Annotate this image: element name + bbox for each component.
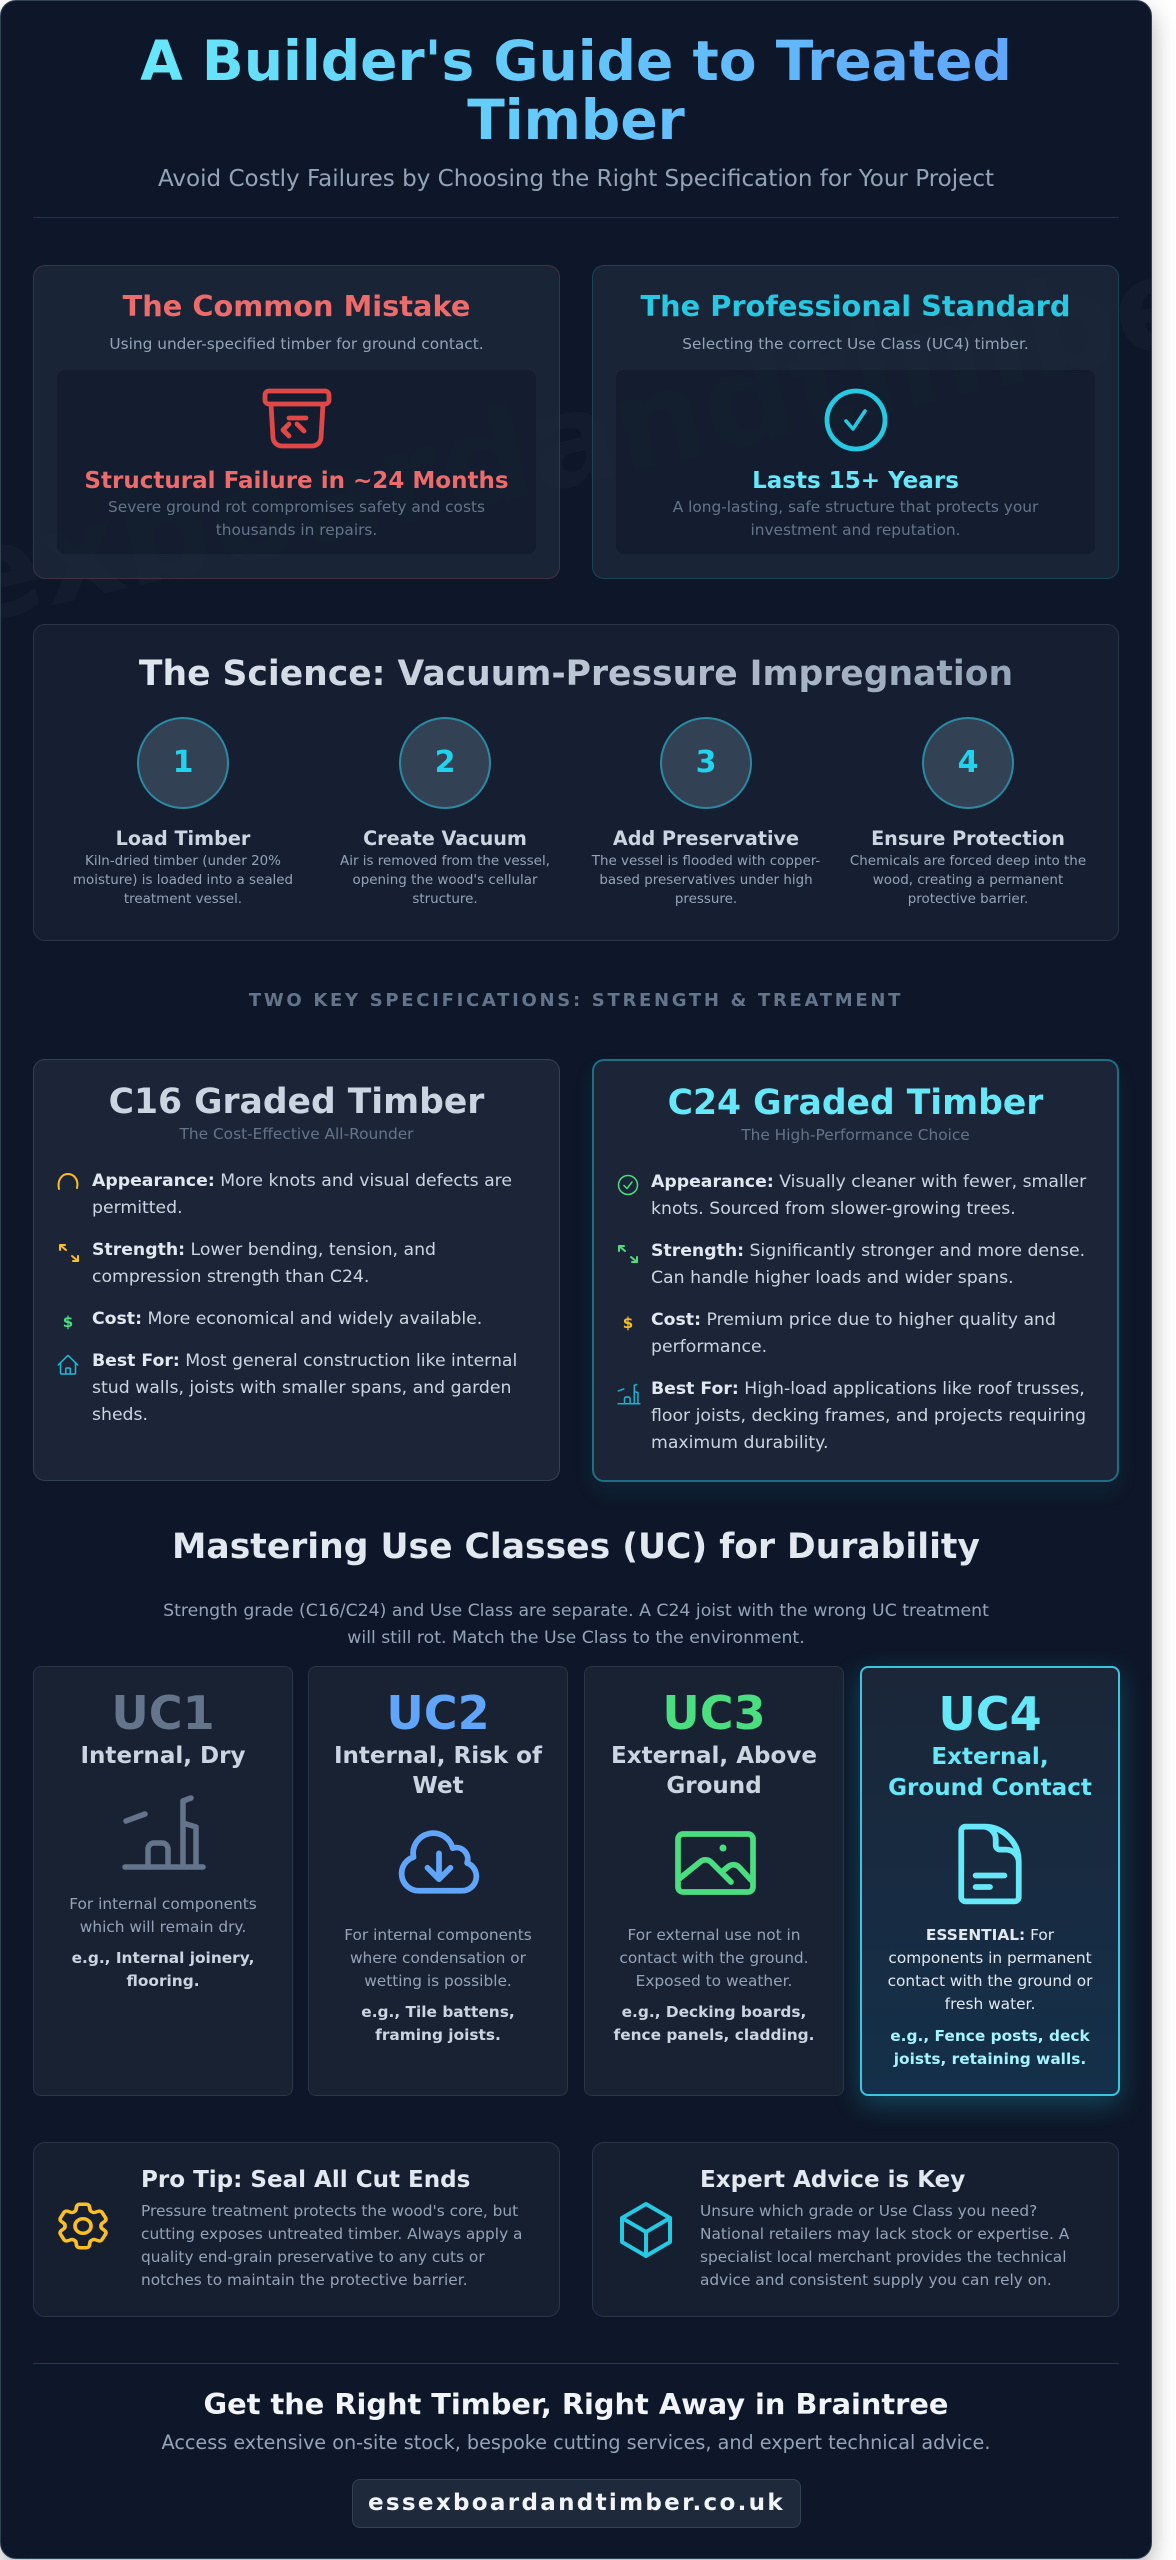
card: UC1 — [33, 1666, 293, 2096]
text: UC2 example: framing joists. — [375, 2026, 501, 2044]
text: pro tip — [141, 2200, 522, 2292]
text: use class intro: will still rot. Match the Use Class to the environment. — [347, 1628, 805, 1648]
panel: C16 — [33, 1059, 560, 1481]
item: appearance — [651, 1172, 1086, 1219]
subtitle: UC3 — [611, 1743, 817, 1799]
icon: UC1 chart — [122, 1795, 206, 1870]
item: cost: Cost: More economical and widely available. — [92, 1309, 482, 1329]
text: pro tip: cutting exposes untreated timber. Always apply a — [141, 2225, 522, 2243]
step number 3: 3 — [696, 745, 716, 780]
icon: arc — [58, 1173, 78, 1190]
text: UC4 example: e.g., Fence posts, deck — [890, 2027, 1090, 2045]
step text: Chemicals are forced deep into the — [850, 854, 1086, 869]
item: strength: Strength: Significantly stronger and more dense. — [651, 1241, 1085, 1261]
step number 3 — [660, 717, 752, 809]
label: UC2: UC2 — [386, 1686, 490, 1740]
text: UC2 description: where condensation or — [350, 1949, 526, 1967]
step title: Add Preservative — [613, 827, 799, 850]
heading: common mistake: The Common Mistake — [123, 289, 470, 323]
text: UC4 description: ESSENTIAL: For — [926, 1926, 1054, 1944]
heading: the science: The Science: Vacuum-Pressure Impregnation — [139, 654, 1013, 694]
heading: C24: C24 Graded Timber — [668, 1083, 1043, 1123]
text: UC3 example: e.g., Decking boards, — [622, 2003, 806, 2021]
panel: C24 — [592, 1059, 1119, 1482]
item: appearance: permitted. — [92, 1198, 183, 1218]
panel: professional standard — [592, 265, 1119, 579]
footer heading: Get the Right Timber, Right Away in Braintree — [204, 2387, 948, 2421]
item: strength: Strength: Lower bending, tension, and — [92, 1240, 436, 1260]
text: UC1 description: which will remain dry. — [80, 1918, 246, 1936]
item: strength: Can handle higher loads and wider spans. — [651, 1268, 1014, 1288]
step text: treatment vessel. — [124, 892, 242, 907]
step text: The vessel is flooded with copper- — [592, 854, 820, 869]
label: UC1: UC1 — [111, 1686, 215, 1740]
subtitle: UC2 — [334, 1743, 542, 1799]
step 3 — [592, 717, 820, 907]
text: UC2 description: wetting is possible. — [364, 1972, 512, 1990]
website button — [352, 2479, 801, 2528]
text: expert advice — [700, 2200, 1069, 2292]
title: A Builder's Guide to Treated — [140, 29, 1012, 93]
footer text: Access extensive on-site stock, bespoke cutting services, and expert technical advice. — [162, 2431, 990, 2454]
step number 2 — [399, 717, 491, 809]
inner result panel — [57, 370, 536, 554]
title: Timber — [467, 88, 685, 152]
text: lasting detail: A long-lasting, safe structure that protects your — [673, 498, 1038, 516]
icon: archive box — [262, 388, 332, 448]
icon: chart small — [617, 1384, 641, 1404]
subtitle: UC2: Wet — [412, 1773, 464, 1799]
website button: essexboardandtimber.co.uk — [368, 2490, 785, 2516]
text: UC1 description: For internal components — [69, 1895, 257, 1913]
step text — [73, 854, 293, 907]
item: cost: performance. — [651, 1337, 767, 1357]
text: lasting detail: investment and reputation. — [750, 521, 961, 539]
text: UC2 description — [344, 1926, 532, 1990]
step title: Ensure Protection — [871, 827, 1065, 850]
step text: pressure. — [675, 892, 737, 907]
text: UC4 description — [888, 1926, 1092, 2013]
card: UC3 — [584, 1666, 844, 2096]
step number 2: 2 — [435, 745, 455, 780]
icon: cube — [614, 2198, 678, 2262]
text: UC2 example: e.g., Tile battens, — [361, 2003, 515, 2021]
item: best for: Best For: Most general construction like internal — [92, 1351, 517, 1371]
icon: dollar: $ — [623, 1314, 633, 1332]
text: failure detail: thousands in repairs. — [216, 521, 377, 539]
subtitle: C24: The High-Performance Choice — [741, 1126, 970, 1144]
text: expert advice: National retailers may lack stock or expertise. A — [700, 2225, 1069, 2243]
text: standard description: Selecting the correct Use Class (UC4) timber. — [682, 335, 1029, 353]
step text — [340, 854, 550, 907]
card: UC2 — [308, 1666, 568, 2096]
step title: Load Timber — [116, 827, 250, 850]
subtitle: UC4 — [888, 1744, 1092, 1801]
item: strength — [92, 1240, 436, 1287]
text: expert advice: advice and consistent supply you can rely on. — [700, 2271, 1052, 2289]
icon: UC4 document — [944, 1818, 1036, 1910]
panel: common mistake — [33, 265, 560, 579]
subtitle: UC3: Ground — [666, 1773, 762, 1799]
text: pro tip: Pressure treatment protects the wood's core, but — [141, 2202, 518, 2220]
text: lasting detail — [673, 498, 1038, 539]
subtitle: UC2: Internal, Risk of — [334, 1743, 542, 1769]
text: pro tip: notches to maintain the protective barrier. — [141, 2271, 468, 2289]
item: best for: floor joists, decking frames, and projects requiring — [651, 1406, 1086, 1426]
title — [131, 1, 1021, 149]
text: UC4 description: contact with the ground or — [888, 1972, 1092, 1990]
text: failure detail — [108, 498, 485, 539]
text: use class intro: Strength grade (C16/C24) and Use Class are separate. A C24 joist with the wrong UC treatment — [163, 1601, 989, 1621]
heading: C16: C16 Graded Timber — [109, 1082, 484, 1122]
text: pro tip: quality end-grain preservative to any cuts or — [141, 2248, 485, 2266]
text: UC3 description: contact with the ground. — [619, 1949, 809, 1967]
text: UC1 example: e.g., Internal joinery, — [72, 1949, 254, 1967]
text: UC3 description — [619, 1926, 809, 1990]
subtitle: C16: The Cost-Effective All-Rounder — [180, 1125, 413, 1143]
text: UC2 description: For internal components — [344, 1926, 532, 1944]
icon: dollar: $ — [63, 1313, 73, 1331]
item: appearance: Appearance: Visually cleaner with fewer, smaller — [651, 1172, 1086, 1192]
item: appearance: Appearance: More knots and visual defects are — [92, 1171, 512, 1191]
label: UC4: UC4 — [938, 1687, 1042, 1741]
item: best for — [92, 1351, 517, 1425]
step text: Air is removed from the vessel, — [340, 854, 550, 869]
item: best for: maximum durability. — [651, 1433, 828, 1453]
subtitle: UC4: Ground Contact — [888, 1775, 1092, 1801]
heading: use classes: Mastering Use Classes (UC) for Durability — [172, 1527, 980, 1567]
icon: check circle — [824, 388, 888, 452]
item: best for: Best For: High-load applications like roof trusses, — [651, 1379, 1085, 1399]
text: UC4 description: components in permanent — [888, 1949, 1092, 1967]
item: best for: stud walls, joists with smaller spans, and garden — [92, 1378, 511, 1398]
subtitle: Avoid Costly Failures by Choosing the Right Specification for Your Project — [158, 166, 994, 192]
inner result panel — [616, 370, 1095, 554]
step text: Kiln-dried timber (under 20% — [85, 854, 281, 869]
icon: UC3 picture — [675, 1831, 756, 1895]
text: UC4 example — [862, 2025, 1118, 2071]
step text: wood, creating a permanent — [873, 873, 1063, 888]
item: best for — [651, 1379, 1086, 1453]
subtitle: UC3: External, Above — [611, 1743, 817, 1769]
step title: Create Vacuum — [363, 827, 527, 850]
panel: expert advice — [592, 2142, 1119, 2317]
step number 4 — [922, 717, 1014, 809]
step text: based preservatives under high — [599, 873, 813, 888]
step text — [592, 854, 820, 907]
step text: protective barrier. — [908, 892, 1028, 907]
subtitle: UC1: Internal, Dry — [80, 1743, 246, 1769]
step text: opening the wood's cellular — [352, 873, 537, 888]
item: appearance: knots. Sourced from slower-growing trees. — [651, 1199, 1016, 1219]
section heading: two key specifications: TWO KEY SPECIFICATIONS: STRENGTH & TREATMENT — [249, 990, 903, 1011]
subtitle: UC4: External, — [931, 1744, 1049, 1770]
step text: moisture) is loaded into a sealed — [73, 873, 293, 888]
item: strength: compression strength than C24. — [92, 1267, 369, 1287]
icon: check circle small — [618, 1174, 638, 1196]
heading: pro tip: Pro Tip: Seal All Cut Ends — [141, 2167, 470, 2193]
text: expert advice: specialist local merchant provides the technical — [700, 2248, 1066, 2266]
text: UC3 description: For external use not in — [627, 1926, 801, 1944]
step text — [850, 854, 1086, 907]
step number 1: 1 — [173, 745, 193, 780]
text: UC1 example — [72, 1949, 254, 1990]
text: UC4 description: fresh water. — [945, 1995, 1035, 2013]
text: mistake description: Using under-specified timber for ground contact. — [109, 335, 484, 353]
icon: arrows out — [59, 1244, 79, 1262]
heading: failure result: Structural Failure in ~24 Months — [84, 468, 509, 494]
step 1 — [73, 717, 293, 907]
text: UC3 example: fence panels, cladding. — [614, 2026, 814, 2044]
item: best for: sheds. — [92, 1405, 148, 1425]
step 2 — [340, 717, 550, 907]
text: UC1 example: flooring. — [126, 1972, 200, 1990]
text: use class intro — [163, 1601, 989, 1648]
item: appearance — [92, 1171, 512, 1218]
text: UC2 example — [361, 2003, 515, 2044]
icon: home — [58, 1354, 78, 1375]
item: cost: Cost: Premium price due to higher quality and — [651, 1310, 1056, 1330]
heading: professional standard: The Professional Standard — [641, 289, 1070, 323]
step text: structure. — [412, 892, 478, 907]
heading: expert advice: Expert Advice is Key — [700, 2167, 965, 2193]
panel: the science — [33, 624, 1119, 941]
text: UC4 example: joists, retaining walls. — [894, 2050, 1086, 2068]
text: failure detail: Severe ground rot compromises safety and costs — [108, 498, 485, 516]
card: UC4 — [860, 1666, 1120, 2096]
item: cost — [651, 1310, 1056, 1357]
text: expert advice: Unsure which grade or Use Class you need? — [700, 2202, 1037, 2220]
item: strength — [651, 1241, 1085, 1288]
text: UC3 description: Exposed to weather. — [636, 1972, 792, 1990]
icon: arrows out — [618, 1245, 638, 1263]
step number 4: 4 — [958, 745, 978, 780]
icon: gear — [51, 2197, 115, 2255]
label: UC3: UC3 — [662, 1686, 766, 1740]
text: UC1 description — [69, 1895, 257, 1936]
panel: pro tip — [33, 2142, 560, 2317]
step 4 — [850, 717, 1086, 907]
icon: UC2 cloud — [398, 1830, 480, 1894]
step number 1 — [137, 717, 229, 809]
text: UC3 example — [614, 2003, 814, 2044]
heading: lasts 15 years: Lasts 15+ Years — [752, 468, 959, 494]
